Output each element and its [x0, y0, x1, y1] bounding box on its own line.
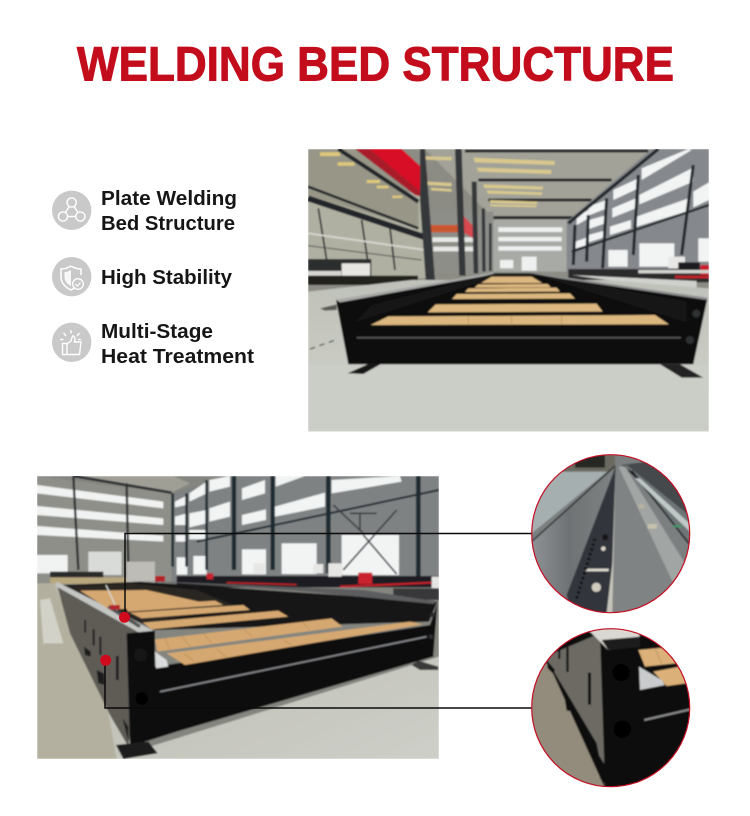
- label: heat treatment: Heat Treatment: [101, 346, 254, 368]
- feature: plate welding bed structure: [52, 188, 237, 235]
- photo: workshop front view of welding bed: [308, 149, 709, 432]
- feature: multi-stage heat treatment: [52, 321, 254, 368]
- feature: high stability: [52, 257, 233, 296]
- connector line: lower marker to bottom detail circle: [105, 660, 532, 708]
- title: WELDING BED STRUCTURE: [77, 38, 674, 92]
- label: multi-stage: Multi-Stage: [101, 321, 213, 343]
- detail circle: bed corner close-up: [525, 627, 695, 790]
- marker: upper red dot: [119, 612, 130, 623]
- connector line: upper marker to top detail circle: [125, 534, 532, 617]
- detail circle: steel rail and rack: [531, 454, 690, 614]
- label: high stability: High Stability: [101, 267, 233, 289]
- feature list: [52, 188, 254, 368]
- label: plate welding: Plate Welding: [101, 188, 237, 210]
- icon: thumbs up with sparks: [52, 323, 91, 362]
- photo: workshop angled view with callout markers: [37, 476, 439, 759]
- icon: connected nodes: [52, 191, 91, 230]
- icon: shield with check: [52, 257, 91, 296]
- label: bed structure: Bed Structure: [101, 213, 235, 235]
- marker: lower red dot: [100, 655, 111, 666]
